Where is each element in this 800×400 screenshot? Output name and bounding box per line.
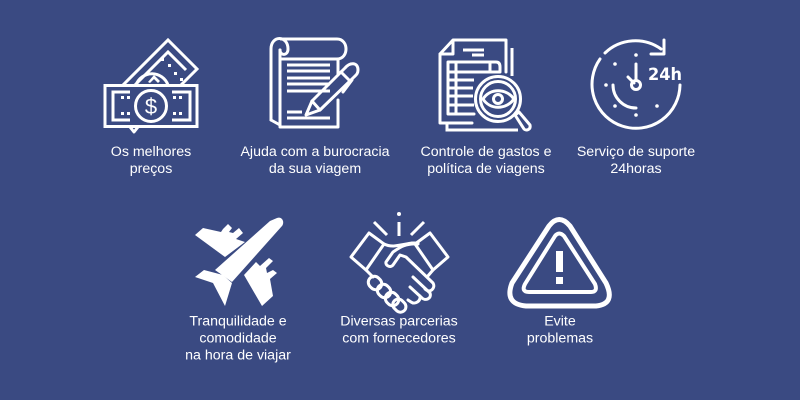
icon: airplane	[195, 218, 283, 306]
icon: documents and magnifier	[440, 40, 530, 130]
label: os melhores precos: preços	[130, 161, 172, 177]
label: controle de gastos: política de viagens	[427, 161, 545, 177]
icon: 24 hour clock	[592, 40, 682, 128]
label: tranquilidade: Tranquilidade e	[189, 314, 287, 330]
label: controle de gastos: Controle de gastos e	[421, 144, 551, 160]
icon: 24 hour clock: 24h	[648, 65, 682, 85]
label: diversas parcerias: Diversas parcerias	[340, 314, 458, 330]
label: evite problemas: problemas	[527, 330, 593, 346]
label: ajuda com a burocracia: Ajuda com a burocracia	[240, 144, 390, 160]
label: tranquilidade: comodidade	[199, 330, 277, 346]
icon: handshake	[351, 212, 448, 314]
label: diversas parcerias: com fornecedores	[342, 330, 456, 346]
icon: money bills	[105, 40, 197, 132]
icon: money bills: $	[145, 94, 157, 119]
icon: warning triangle	[510, 220, 609, 306]
label: os melhores precos: Os melhores	[111, 144, 191, 160]
label: tranquilidade: na hora de viajar	[185, 348, 291, 364]
label: ajuda com a burocracia: da sua viagem	[269, 161, 361, 177]
label: evite problemas: Evite	[544, 314, 576, 330]
icon: document and pen	[271, 38, 358, 127]
label: servico de suporte: Serviço de suporte	[577, 144, 695, 160]
label: servico de suporte: 24horas	[610, 161, 662, 177]
